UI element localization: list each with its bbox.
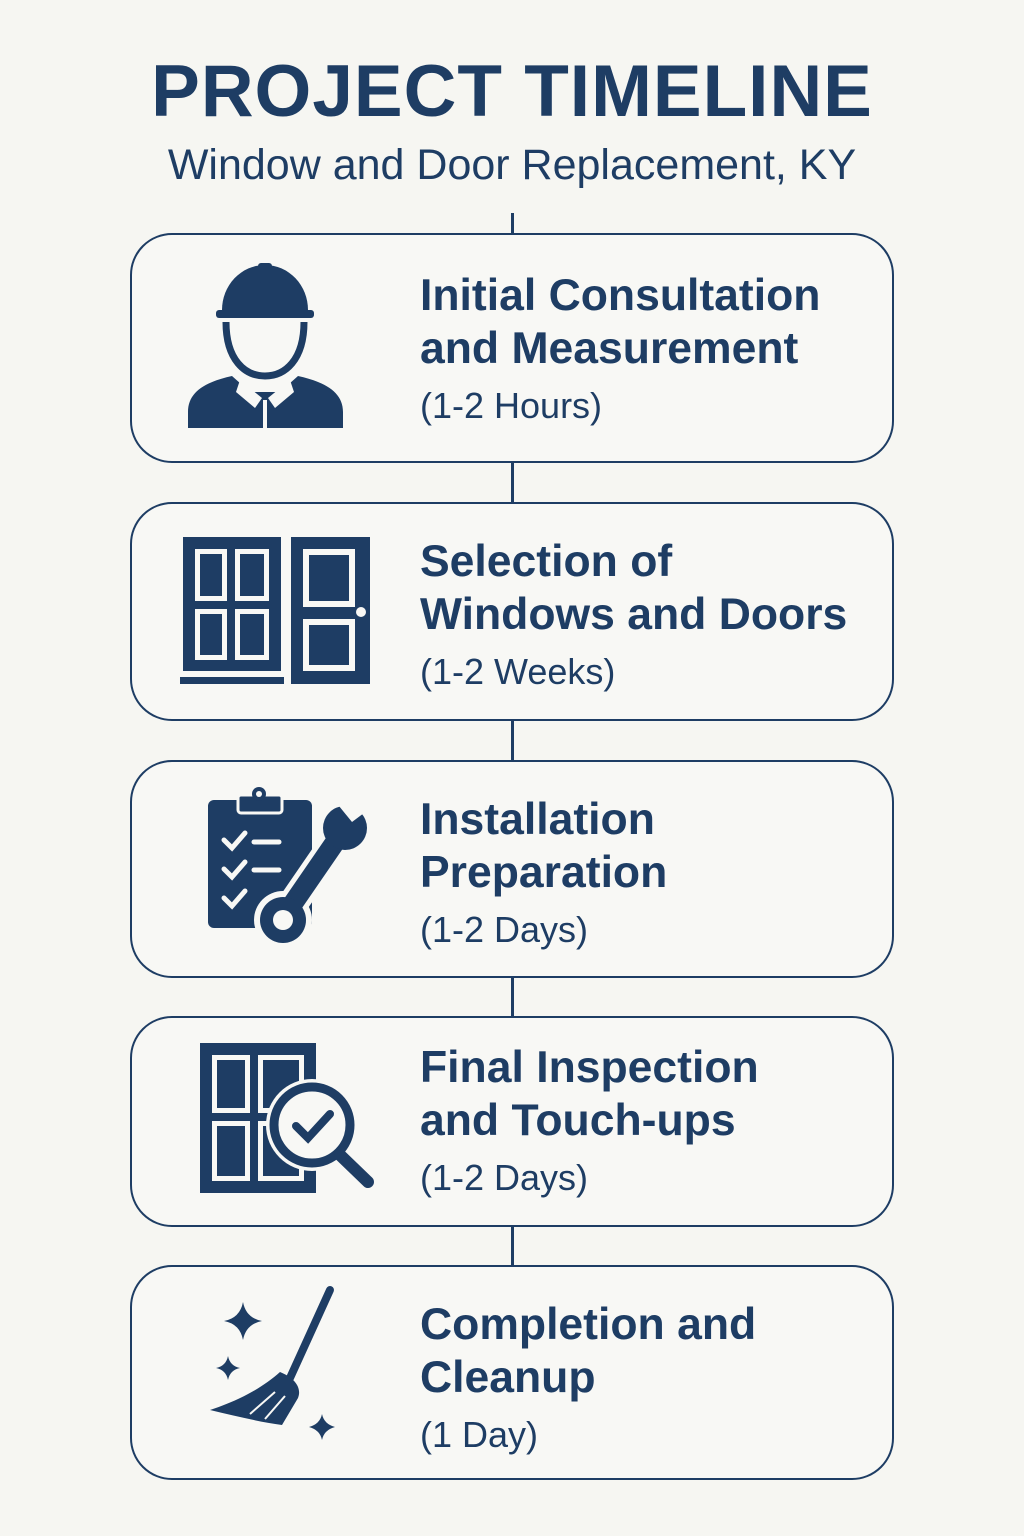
icon: clipboard and wrench <box>208 787 373 949</box>
icon: broom and sparkles <box>210 1290 335 1440</box>
card 5 text: Completion and <box>420 1300 756 1349</box>
card 4 text: and Touch-ups <box>420 1096 736 1145</box>
card 1 text <box>420 271 820 426</box>
card 5 text <box>420 1300 756 1455</box>
card 1 text: and Measurement <box>420 324 798 373</box>
card 4 text: (1-2 Days) <box>420 1157 588 1198</box>
icon: window with magnifier <box>200 1043 368 1193</box>
card 3 text: (1-2 Days) <box>420 909 588 950</box>
card 4 text <box>420 1043 759 1198</box>
card 2 text <box>420 537 847 692</box>
card 3 <box>130 760 894 978</box>
card 1 <box>130 233 894 463</box>
card 5 <box>130 1265 894 1480</box>
card 4 text: Final Inspection <box>420 1043 759 1092</box>
card 5 text: Cleanup <box>420 1353 596 1402</box>
icon: window and door <box>180 537 370 684</box>
card 2 text: Selection of <box>420 537 672 586</box>
card 2 <box>130 502 894 721</box>
card 4 <box>130 1016 894 1227</box>
icon: worker <box>188 263 343 428</box>
wrench outline halo <box>283 838 338 918</box>
card 5 text: (1 Day) <box>420 1414 538 1455</box>
connector line <box>511 213 514 1273</box>
card 3 text: Installation <box>420 795 655 844</box>
card 1 text: (1-2 Hours) <box>420 385 602 426</box>
subtitle: Window and Door Replacement, KY <box>168 141 856 189</box>
card 3 text <box>420 795 667 950</box>
card 1 text: Initial Consultation <box>420 271 820 320</box>
card 2 text: (1-2 Weeks) <box>420 651 615 692</box>
card 3 text: Preparation <box>420 848 667 897</box>
card 2 text: Windows and Doors <box>420 590 847 639</box>
title: PROJECT TIMELINE <box>151 51 873 132</box>
